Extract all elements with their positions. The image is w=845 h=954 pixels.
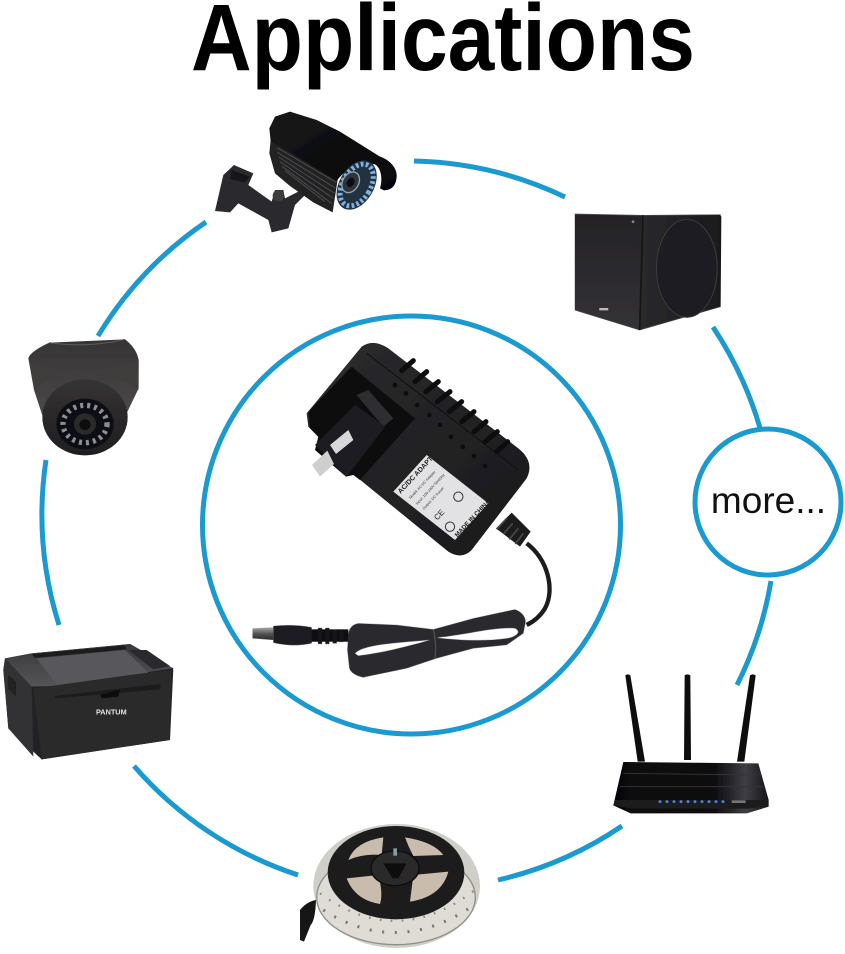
icon: laser printer xyxy=(3,644,173,759)
more circle xyxy=(695,429,841,575)
more circle: more... xyxy=(711,480,826,521)
icon: dome security camera xyxy=(28,339,139,455)
rating label: Model: AC-DC Adapter xyxy=(408,469,437,500)
icon: wifi router xyxy=(613,674,769,813)
vents xyxy=(402,361,508,452)
icon: laser printer: PANTUM xyxy=(96,710,127,717)
rating label: Input: 100-240V 50/60Hz xyxy=(415,473,446,506)
icon: LED strip reel xyxy=(300,824,480,948)
outer ring arcs xyxy=(42,161,771,880)
rating label: CE xyxy=(432,508,446,522)
lens face xyxy=(328,153,385,217)
bracket xyxy=(215,165,305,232)
icon: AC/DC power adapter xyxy=(253,343,550,677)
icon: bullet security camera xyxy=(215,112,397,232)
central blue circle xyxy=(202,316,620,734)
rating label: MADE IN CHINA xyxy=(454,498,492,539)
DC jack and flat cable xyxy=(253,609,526,677)
plug blades xyxy=(330,430,353,454)
rating label xyxy=(393,448,492,540)
rating label: AC/DC ADAPTOR xyxy=(397,448,442,495)
strain relief xyxy=(496,513,531,547)
plug face xyxy=(308,367,415,480)
hood xyxy=(269,112,397,190)
rating label: Output: DC Power xyxy=(422,486,445,511)
adapter body xyxy=(307,343,529,555)
cord xyxy=(527,543,550,625)
icon: subwoofer speaker xyxy=(575,214,721,330)
body xyxy=(269,140,338,212)
